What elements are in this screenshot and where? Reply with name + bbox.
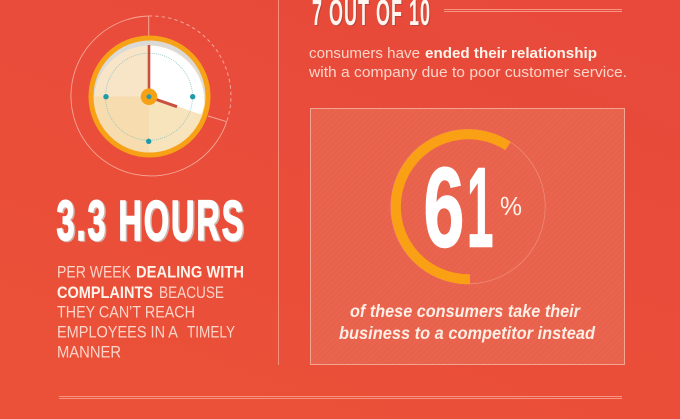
clock hands [149,45,177,107]
donut chart: 61 percent [391,130,545,284]
infographic canvas [56,0,626,399]
text block: hours description: BEACUSE [159,283,224,302]
panel: 61 percent [310,108,624,364]
text block: consumers ended relationship [308,45,627,81]
heading: 3.3 hours: 3.3 HOURS [56,188,243,252]
hour markers [103,94,195,144]
text block: hours description: MANNER [57,343,121,362]
caption [339,301,595,343]
text block: hours description: EMPLOYEES IN A [57,323,179,342]
percent sign: % [500,191,522,221]
caption: business to a competitor instead [339,323,595,343]
orange rim [91,38,208,155]
heading: 3.3 hours: 3.3 HOURS [58,189,245,253]
clock hub [141,88,157,105]
text block: hours description: COMPLAINTS [57,283,153,302]
clock face [94,40,206,152]
clock icon [71,16,231,176]
text block: consumers ended relationship: with a company due to poor customer service. [308,64,627,81]
caption: of these consumers take their [350,301,581,321]
value: 61 [424,146,493,272]
dotted inner dial [106,53,192,140]
text block: hours description [57,263,244,362]
text block: hours description: THEY CAN’T REACH [57,303,195,322]
text block: hours description: TIMELY [187,323,235,342]
text block: hours description: DEALING WITH [136,263,244,282]
text block: hours description: PER WEEK [57,263,132,282]
value: 61: 6 [424,146,464,272]
text block: consumers ended relationship: ended their relationship [425,45,597,62]
outer elapsed-time ring [71,16,231,176]
text block: consumers ended relationship: consumers have [309,45,420,62]
value: 61: 1 [467,146,493,271]
